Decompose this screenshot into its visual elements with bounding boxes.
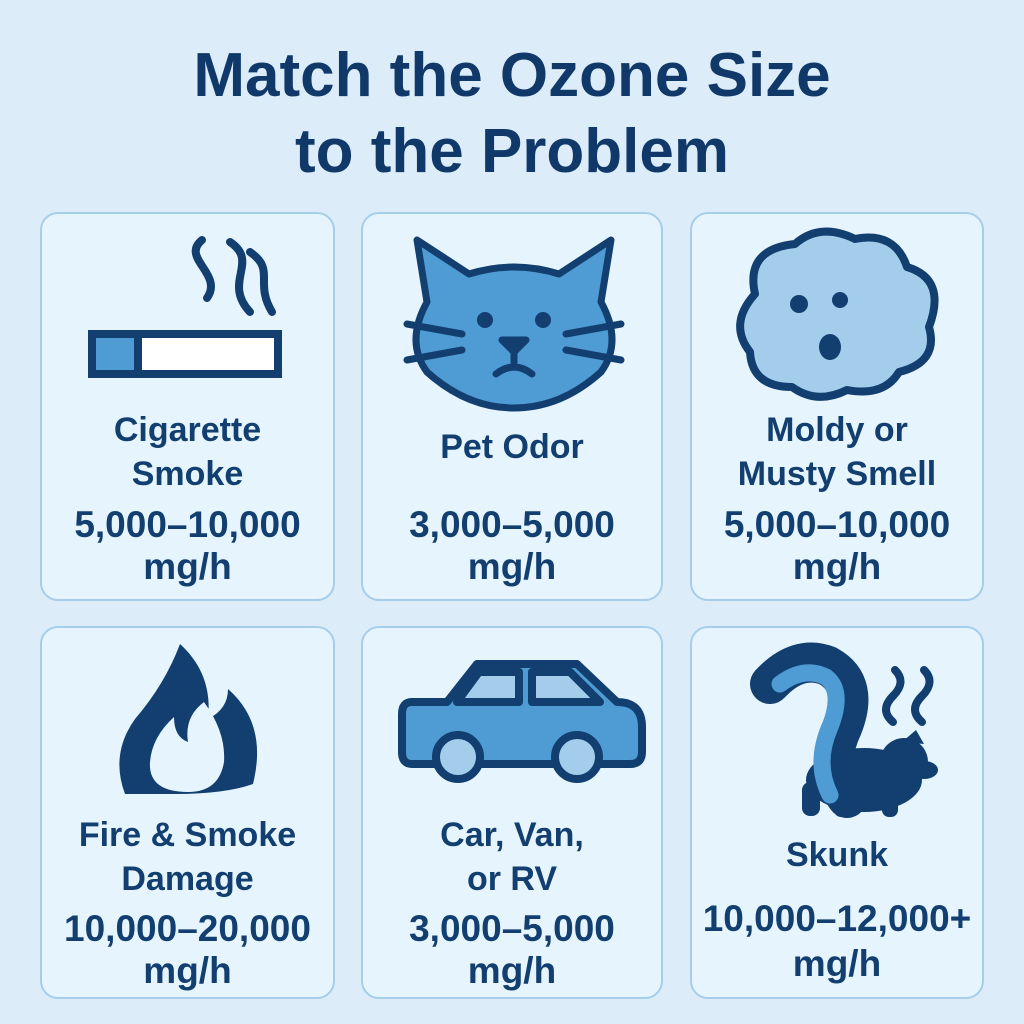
value: 10,000–12,000+ bbox=[703, 898, 971, 939]
icon: flame bbox=[119, 644, 258, 794]
value: mg/h bbox=[793, 546, 881, 587]
panel: pet odor bbox=[361, 212, 663, 601]
value bbox=[74, 504, 301, 587]
title: to the Problem bbox=[295, 117, 729, 186]
value: 3,000–5,000 bbox=[409, 908, 615, 949]
icon: car bbox=[398, 660, 646, 783]
label bbox=[114, 411, 261, 493]
value: 10,000–20,000 bbox=[64, 908, 311, 949]
panel: skunk bbox=[690, 626, 984, 999]
label: Fire & Smoke bbox=[79, 816, 296, 854]
panel: fire bbox=[40, 626, 335, 999]
label bbox=[738, 411, 936, 493]
value: mg/h bbox=[143, 546, 232, 587]
label: Moldy or bbox=[766, 411, 908, 449]
title bbox=[193, 41, 831, 186]
title: Match the Ozone Size bbox=[193, 41, 831, 110]
label: Car, Van, bbox=[440, 816, 584, 854]
value bbox=[724, 504, 950, 587]
label bbox=[440, 816, 584, 898]
value: mg/h bbox=[468, 950, 556, 991]
value: 3,000–5,000 bbox=[409, 504, 615, 545]
value bbox=[409, 908, 615, 991]
value bbox=[703, 898, 971, 984]
icon: cigarette bbox=[88, 236, 282, 378]
label bbox=[79, 816, 296, 898]
icon: cloud bbox=[736, 228, 939, 401]
value: mg/h bbox=[143, 950, 232, 991]
icon: skunk bbox=[750, 642, 938, 818]
value: 5,000–10,000 bbox=[74, 504, 301, 545]
panel: car bbox=[361, 626, 663, 999]
panel: moldy bbox=[690, 212, 984, 601]
icon: cat bbox=[404, 236, 624, 412]
value bbox=[64, 908, 311, 991]
value: mg/h bbox=[468, 546, 556, 587]
label: Pet Odor bbox=[440, 428, 584, 466]
label: Skunk bbox=[786, 836, 888, 874]
value bbox=[409, 504, 615, 587]
value: 5,000–10,000 bbox=[724, 504, 950, 545]
label: Musty Smell bbox=[738, 455, 936, 493]
label: Damage bbox=[121, 860, 254, 898]
label: Smoke bbox=[132, 455, 243, 493]
panel: cigarette smoke bbox=[40, 212, 335, 601]
value: mg/h bbox=[793, 943, 881, 984]
label: or RV bbox=[467, 860, 557, 898]
label: Cigarette bbox=[114, 411, 261, 449]
